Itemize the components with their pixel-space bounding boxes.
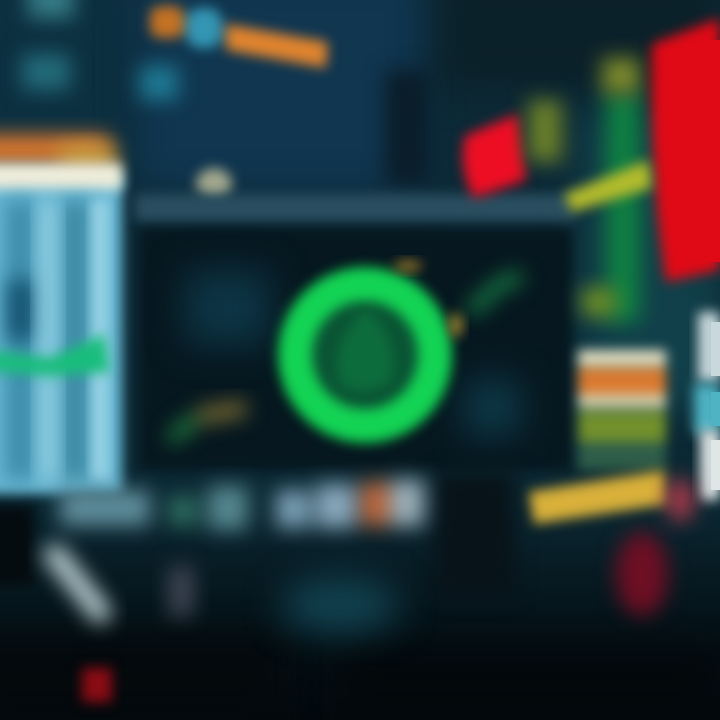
large red banner [652, 18, 720, 282]
monitor top shelf [135, 194, 575, 222]
small blue block [140, 66, 178, 100]
green ring chart [295, 260, 463, 426]
small beige lamp [196, 168, 232, 200]
white diagonal stroke [55, 555, 100, 612]
left building [0, 135, 122, 494]
green and orange sparkline left [170, 408, 246, 440]
right stacked sign [578, 350, 666, 470]
monitor screen [140, 228, 572, 470]
yellow-green slanted bar [564, 160, 652, 212]
red sign [463, 114, 526, 198]
right edge white shapes [694, 312, 720, 500]
top-left teal blocks [22, 0, 74, 90]
green tower [606, 92, 640, 322]
yellow slanted bar lower right [528, 470, 668, 524]
dark block left [0, 505, 34, 585]
monitor stand [435, 472, 515, 597]
bottom right red shape [616, 532, 668, 616]
top orange and blue sign [150, 6, 328, 68]
small red square [82, 668, 112, 702]
green sparkline right [470, 276, 522, 312]
olive sign [528, 100, 562, 162]
dark muted bar [168, 566, 194, 616]
keyboard row [60, 480, 424, 530]
